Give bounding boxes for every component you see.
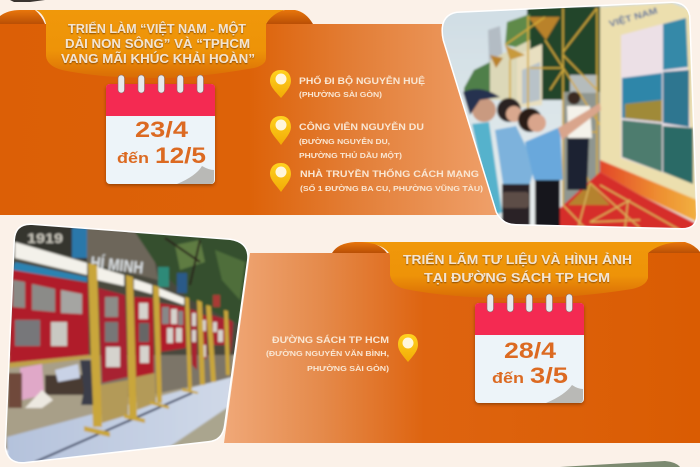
- location: Nhà truyền thống cách mạng: NHÀ TRUYỀN THỐNG CÁCH MẠNG: [300, 168, 479, 180]
- location: Công viên Nguyễn Du: [270, 116, 424, 160]
- calendar: 23/4 to 12/5: đến: [117, 150, 149, 167]
- title text: VANG MÃI KHÚC KHẢI HOÀN”: [61, 51, 255, 66]
- board four: [159, 288, 184, 305]
- panel: exhibition two: [224, 242, 700, 443]
- calendar: 28/4 to 3/5: đến: [492, 370, 524, 387]
- location: Công viên Nguyễn Du: CÔNG VIÊN NGUYỄN DU: [299, 121, 424, 133]
- ground: [0, 355, 240, 450]
- location: Đường sách TP HCM: PHƯỜNG SÀI GÒN): [307, 364, 389, 373]
- ribbon fold tabs: [0, 10, 313, 24]
- location: Nguyễn Huệ: (PHƯỜNG SÀI GÒN): [299, 90, 382, 99]
- far boards: [190, 309, 197, 370]
- location: Đường sách TP HCM: [266, 334, 418, 373]
- calendar: 23/4 to 12/5: [106, 75, 215, 184]
- photo: visitors at outdoor exhibition: [430, 0, 700, 235]
- orange band: [0, 24, 497, 215]
- location: Công viên Nguyễn Du: (ĐƯỜNG NGUYỄN DU,: [299, 137, 390, 146]
- photo: street exhibition boards on book street: HÍ MINH: [90, 253, 144, 278]
- person legs: [80, 360, 93, 405]
- ribbon fold tabs: [332, 242, 700, 253]
- board photographs: [13, 280, 223, 367]
- photo: visitors at outdoor exhibition: VIỆT NAM: [608, 5, 659, 29]
- board one: [15, 242, 87, 275]
- calendar: 28/4 to 3/5: 3/5: [530, 363, 568, 388]
- photo fragment: next section: [560, 461, 680, 467]
- orange band: [224, 253, 700, 443]
- street signs: [72, 228, 220, 307]
- pink stand, bin and box: [20, 364, 44, 400]
- title text: TẠI ĐƯỜNG SÁCH TP HCM: [424, 270, 610, 285]
- red floor and gold frame: [560, 172, 697, 235]
- photo: street exhibition boards on book street: 1919: [27, 230, 63, 246]
- title text: DẢI NON SÔNG” VÀ “TPHCM: [65, 36, 250, 51]
- location: Nhà truyền thống cách mạng: (SỐ 1 ĐƯỜNG BA CU, PHƯỜNG VŨNG TÀU): [300, 183, 483, 193]
- woman three: [518, 108, 542, 132]
- street backdrop: [10, 225, 238, 357]
- location: Nhà truyền thống cách mạng: [270, 163, 483, 193]
- title text: TRIỂN LÃM TƯ LIỆU VÀ HÌNH ẢNH: [403, 252, 632, 267]
- background: [527, 6, 600, 100]
- panel: exhibition one: [0, 10, 497, 215]
- calendar: 23/4 to 12/5: 12/5: [155, 143, 206, 168]
- board two: [97, 267, 124, 286]
- title ribbon: [362, 242, 680, 298]
- photo fragment: previous section: [10, 0, 45, 2]
- title text: TRIỂN LÀM “VIỆT NAM - MỘT: [68, 21, 246, 36]
- man with cap: [472, 122, 502, 218]
- calendar: 28/4 to 3/5: [475, 294, 584, 403]
- title text: [403, 252, 632, 285]
- gold posts and feet: [84, 263, 230, 437]
- calendar: 23/4 to 12/5: 23/4: [135, 117, 189, 142]
- location: Nguyễn Huệ: PHỐ ĐI BỘ NGUYỄN HUỆ: [299, 75, 425, 87]
- title text: [61, 21, 255, 66]
- person in white shirt: [567, 106, 592, 138]
- location: Công viên Nguyễn Du: PHƯỜNG THỦ DẦU MỘT): [299, 150, 402, 160]
- woman two: [497, 98, 521, 122]
- location: Đường sách TP HCM: ĐƯỜNG SÁCH TP HCM: [272, 334, 389, 346]
- title ribbon: [36, 10, 284, 78]
- photo: street exhibition boards on book street: [0, 220, 255, 466]
- calendar: 28/4 to 3/5: 28/4: [504, 338, 557, 363]
- poster wall: [600, 3, 697, 222]
- location: Đường sách TP HCM: (ĐƯỜNG NGUYỄN VĂN BÌNH,: [266, 349, 389, 358]
- location: Nguyễn Huệ: [270, 70, 425, 99]
- board three: [134, 279, 152, 294]
